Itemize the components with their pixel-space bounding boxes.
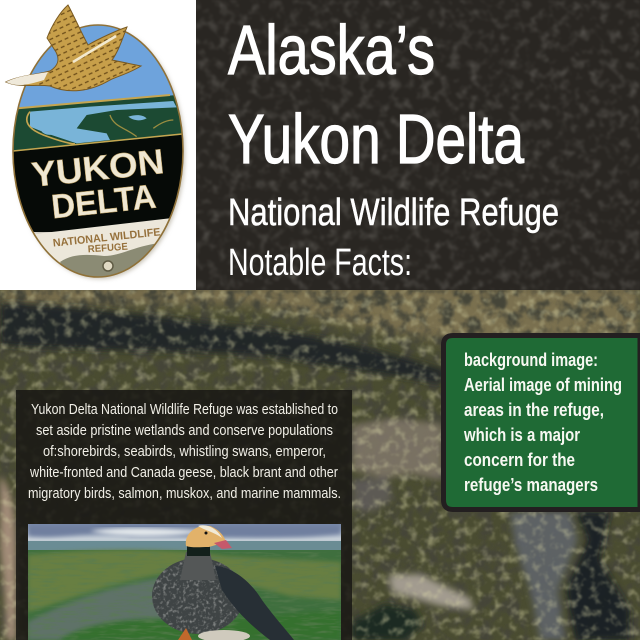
heading: notable facts: Notable Facts:	[228, 242, 412, 284]
title	[228, 11, 524, 178]
text block: description	[28, 401, 341, 502]
goose	[6, 5, 141, 91]
badge: Yukon Delta emblem: REFUGE	[87, 242, 128, 255]
text block: description: Yukon Delta National Wildlife Refuge was established to	[31, 401, 338, 418]
grey mining spoil areas	[0, 418, 630, 640]
photo: emperor goose on nest	[28, 524, 341, 640]
callout text: areas in the refuge,	[464, 400, 604, 420]
callout text: which is a major	[463, 425, 580, 445]
goose body	[152, 558, 244, 634]
panel: refuge description	[16, 390, 352, 640]
callout text: refuge’s managers	[464, 475, 598, 495]
callout text	[463, 350, 622, 495]
text block: description: of:shorebirds, seabirds, whistling swans, emperor,	[43, 443, 326, 460]
badge: Yukon Delta emblem	[0, 5, 196, 290]
title: Yukon Delta	[228, 100, 524, 178]
badge: Yukon Delta emblem: DELTA	[49, 178, 158, 226]
callout text: concern for the	[464, 450, 575, 470]
river channel	[0, 303, 445, 384]
title: Alaska’s	[228, 11, 435, 89]
badge: Yukon Delta emblem: NATIONAL WILDLIFE	[52, 226, 161, 250]
background: aerial image of mining areas	[0, 285, 640, 640]
badge lettering: YUKON	[30, 142, 166, 195]
subtitle: National Wildlife Refuge	[228, 192, 559, 234]
text block: description: set aside pristine wetlands and conserve populations	[36, 422, 333, 439]
callout text: background image:	[464, 350, 598, 370]
callout: background image note	[444, 336, 640, 510]
dark title background	[196, 0, 640, 290]
white badge panel	[0, 0, 196, 290]
text block: description: migratory birds, salmon, muskox, and marine mammals.	[28, 485, 341, 502]
text block: description: white-fronted and Canada geese, black brant and other	[29, 464, 338, 481]
